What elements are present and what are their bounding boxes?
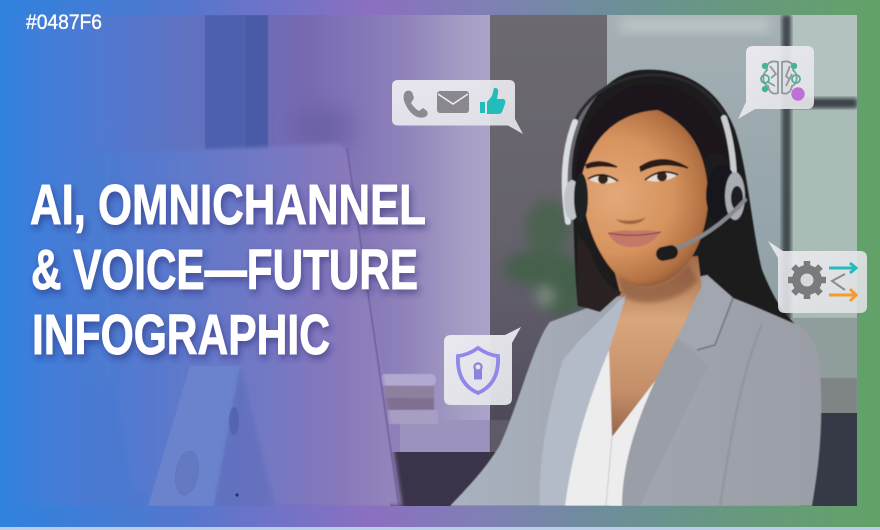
bubble: security shield <box>444 327 521 405</box>
bubble: automation gear <box>768 241 867 313</box>
right lapel <box>676 275 733 340</box>
hex code label: #0487F6 <box>26 11 102 34</box>
hair front <box>581 105 708 184</box>
blazer <box>450 275 821 506</box>
brows <box>586 160 688 171</box>
icon: envelope <box>437 91 469 113</box>
woman with headset <box>450 70 821 506</box>
icon: workflow arrows <box>829 263 856 301</box>
icon: circuit brain <box>761 61 800 94</box>
left lapel <box>540 293 627 506</box>
bottom edge strip <box>0 527 880 530</box>
icon: phone <box>404 90 428 118</box>
plant <box>504 200 590 315</box>
eyes <box>588 172 678 184</box>
shirt <box>564 350 656 506</box>
chat bubble with contact icons <box>392 80 523 134</box>
title: AI, OMNICHANNEL <box>30 173 426 237</box>
title: INFOGRAPHIC <box>32 303 330 367</box>
monitor <box>78 144 402 506</box>
lips <box>608 230 661 247</box>
title <box>30 173 426 367</box>
headset <box>564 75 745 262</box>
bubble: AI brain <box>738 46 814 119</box>
icon: thumbs up <box>480 88 505 114</box>
icon: gear <box>788 261 826 299</box>
face <box>582 106 709 286</box>
hair back <box>572 70 795 324</box>
side hair <box>758 271 795 324</box>
shadow under chin <box>618 264 698 303</box>
icon: shield with keyhole <box>458 348 498 393</box>
title: & VOICE—FUTURE <box>31 238 418 302</box>
nose <box>616 217 646 224</box>
neck and chest <box>609 256 708 437</box>
icon: purple dot <box>791 87 805 101</box>
